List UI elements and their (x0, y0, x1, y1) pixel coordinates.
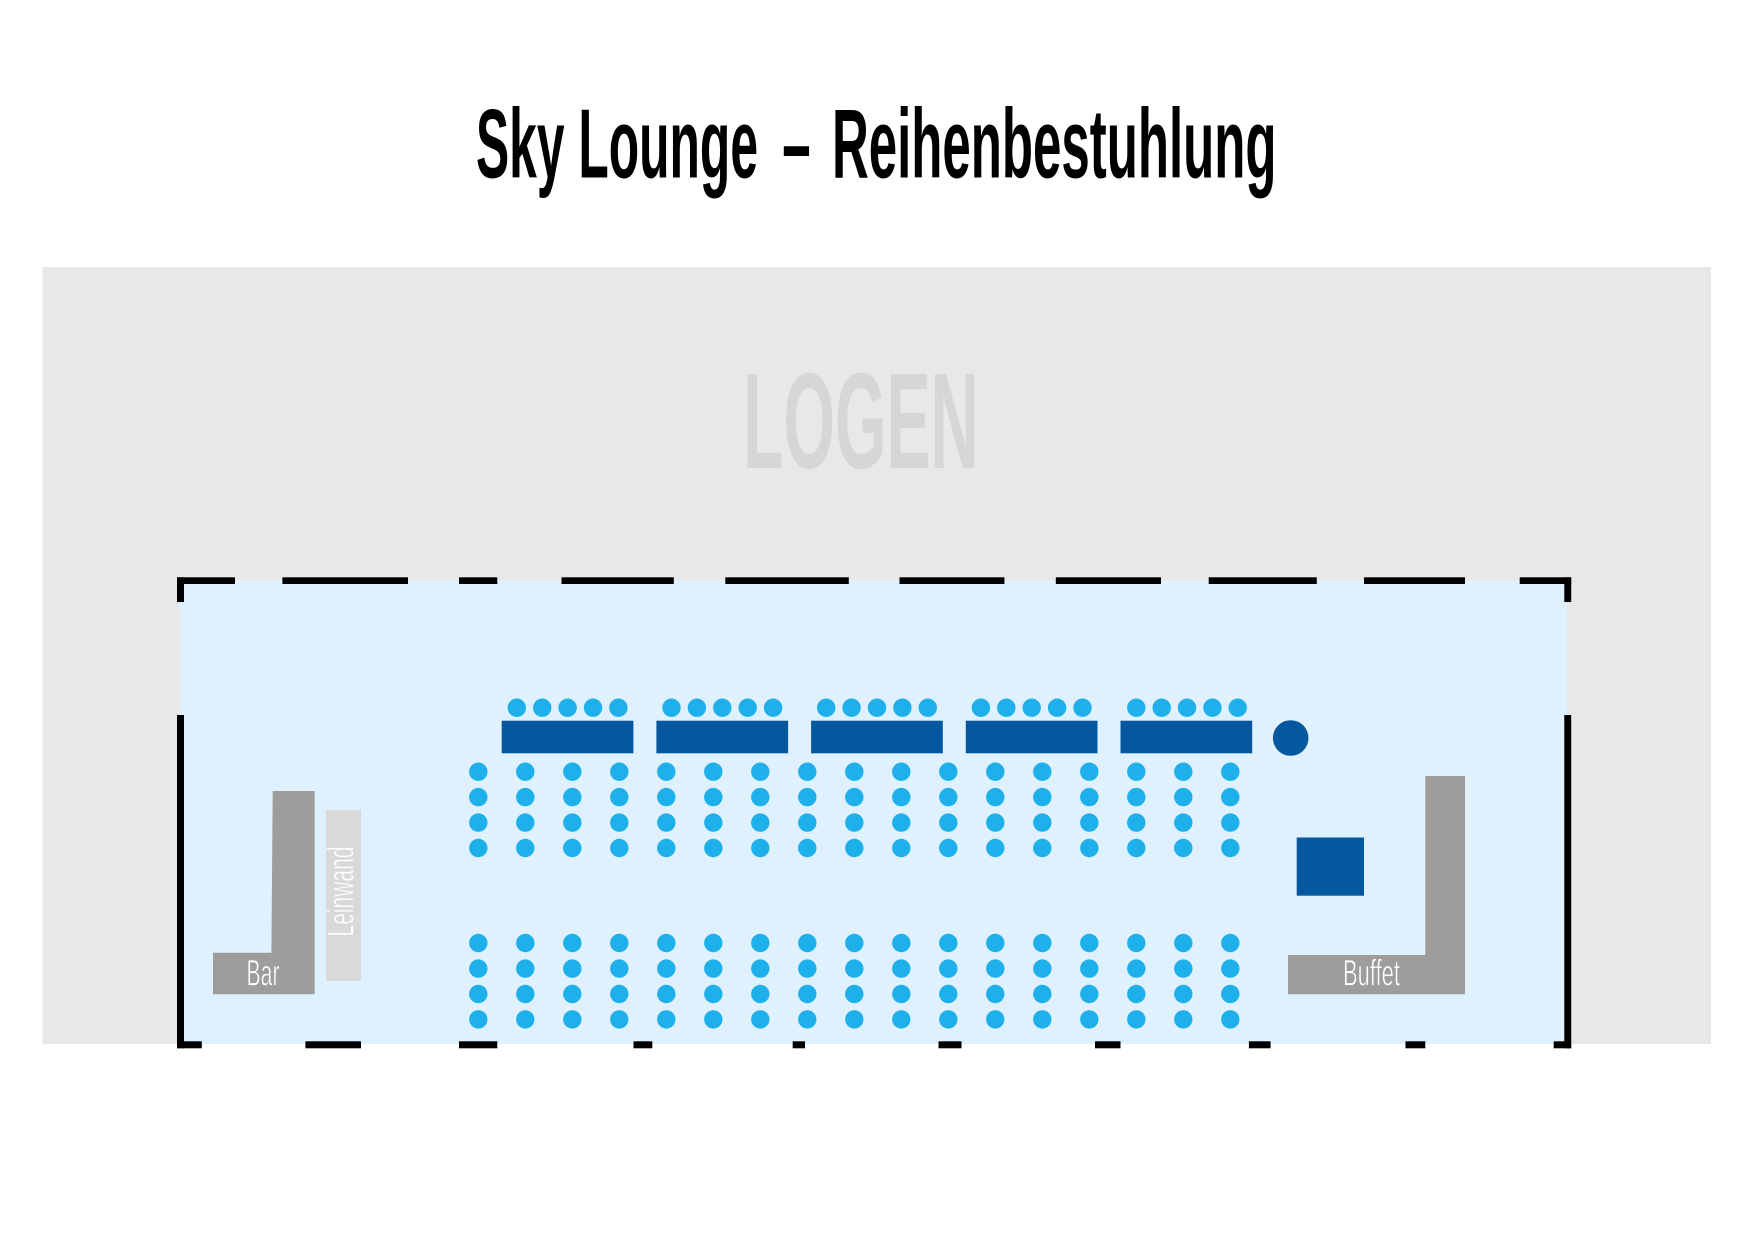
audience seating: front block (469, 762, 1240, 857)
title: Reihenbestuhlung (832, 88, 1276, 198)
audience seating: rear block (469, 934, 1240, 1029)
technics table: square (1297, 838, 1364, 896)
dashed wall outline (177, 577, 1571, 1048)
seats at stage tables (508, 698, 1247, 717)
bar counter (213, 791, 315, 994)
label: Bar: Bar (246, 953, 280, 994)
label: Leinwand: Leinwand (320, 846, 361, 936)
title (476, 88, 1276, 198)
stage tables (502, 721, 1252, 753)
projection screen (320, 810, 361, 981)
buffet counter (1288, 776, 1465, 994)
panel: Sky Lounge floor (180, 580, 1567, 1044)
text: LOGEN (743, 344, 978, 497)
label: Buffet: Buffet (1343, 953, 1400, 994)
lectern: round (1273, 720, 1308, 756)
title: – (782, 88, 811, 198)
panel: Logen area (42, 267, 1711, 1044)
title: Sky Lounge (476, 88, 758, 198)
